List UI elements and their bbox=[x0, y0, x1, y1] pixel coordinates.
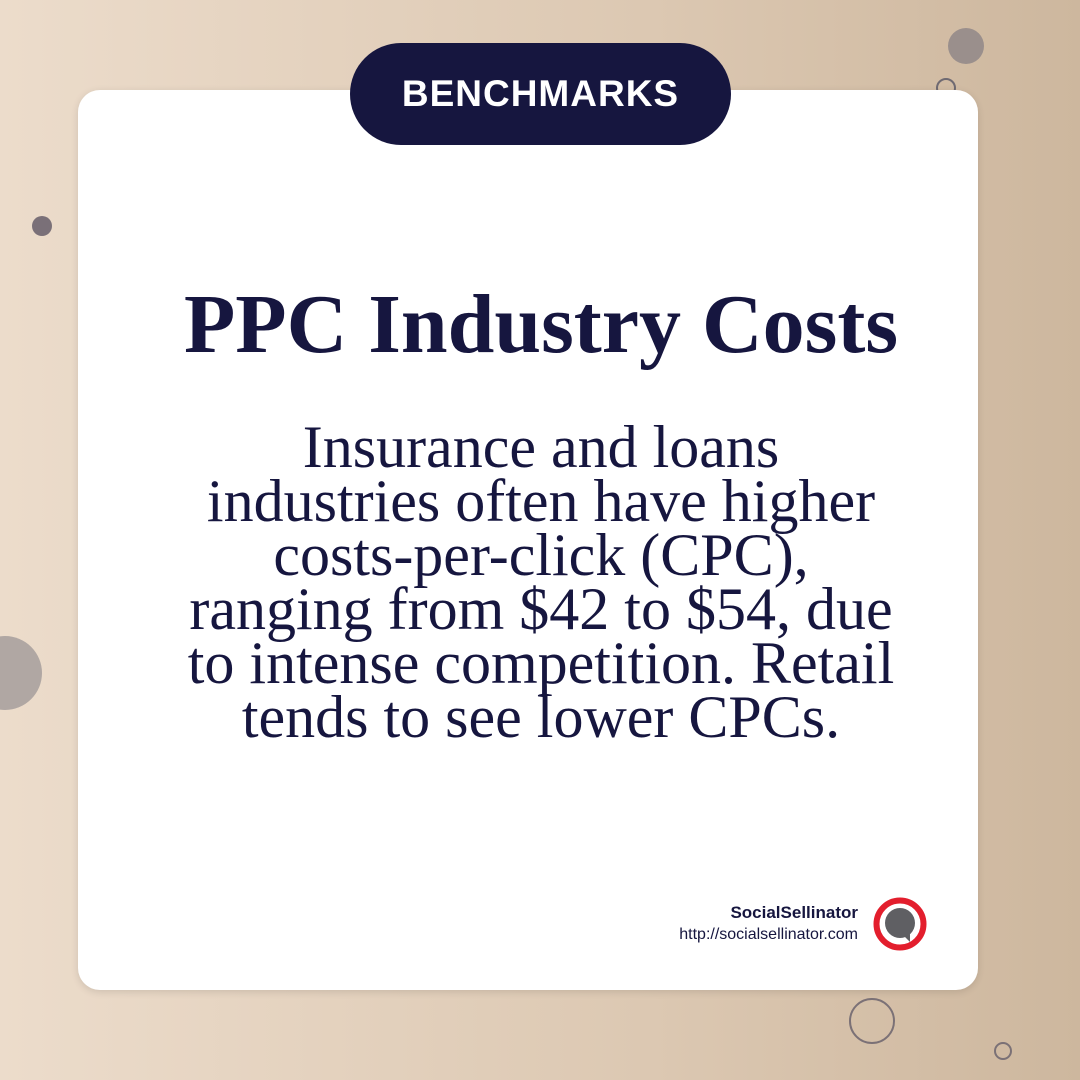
heading pill: BENCHMARKS bbox=[350, 43, 731, 145]
title: PPC Industry Costs bbox=[184, 278, 898, 371]
panel: card bbox=[78, 90, 978, 990]
body text: Insurance and loans bbox=[303, 414, 779, 480]
body text: ranging from $42 to $54, due bbox=[189, 576, 893, 642]
body text bbox=[188, 414, 894, 750]
icon: logo bbox=[874, 898, 926, 950]
body text: costs-per-click (CPC), bbox=[273, 522, 809, 588]
brand text: http://socialsellinator.com bbox=[679, 926, 858, 943]
heading pill: BENCHMARKS: BENCHMARKS bbox=[402, 73, 679, 114]
brand text bbox=[679, 903, 858, 943]
body text: tends to see lower CPCs. bbox=[242, 684, 840, 750]
body text: to intense competition. Retail bbox=[188, 630, 894, 696]
brand text: SocialSellinator bbox=[730, 903, 858, 922]
body text: industries often have higher bbox=[207, 468, 875, 534]
